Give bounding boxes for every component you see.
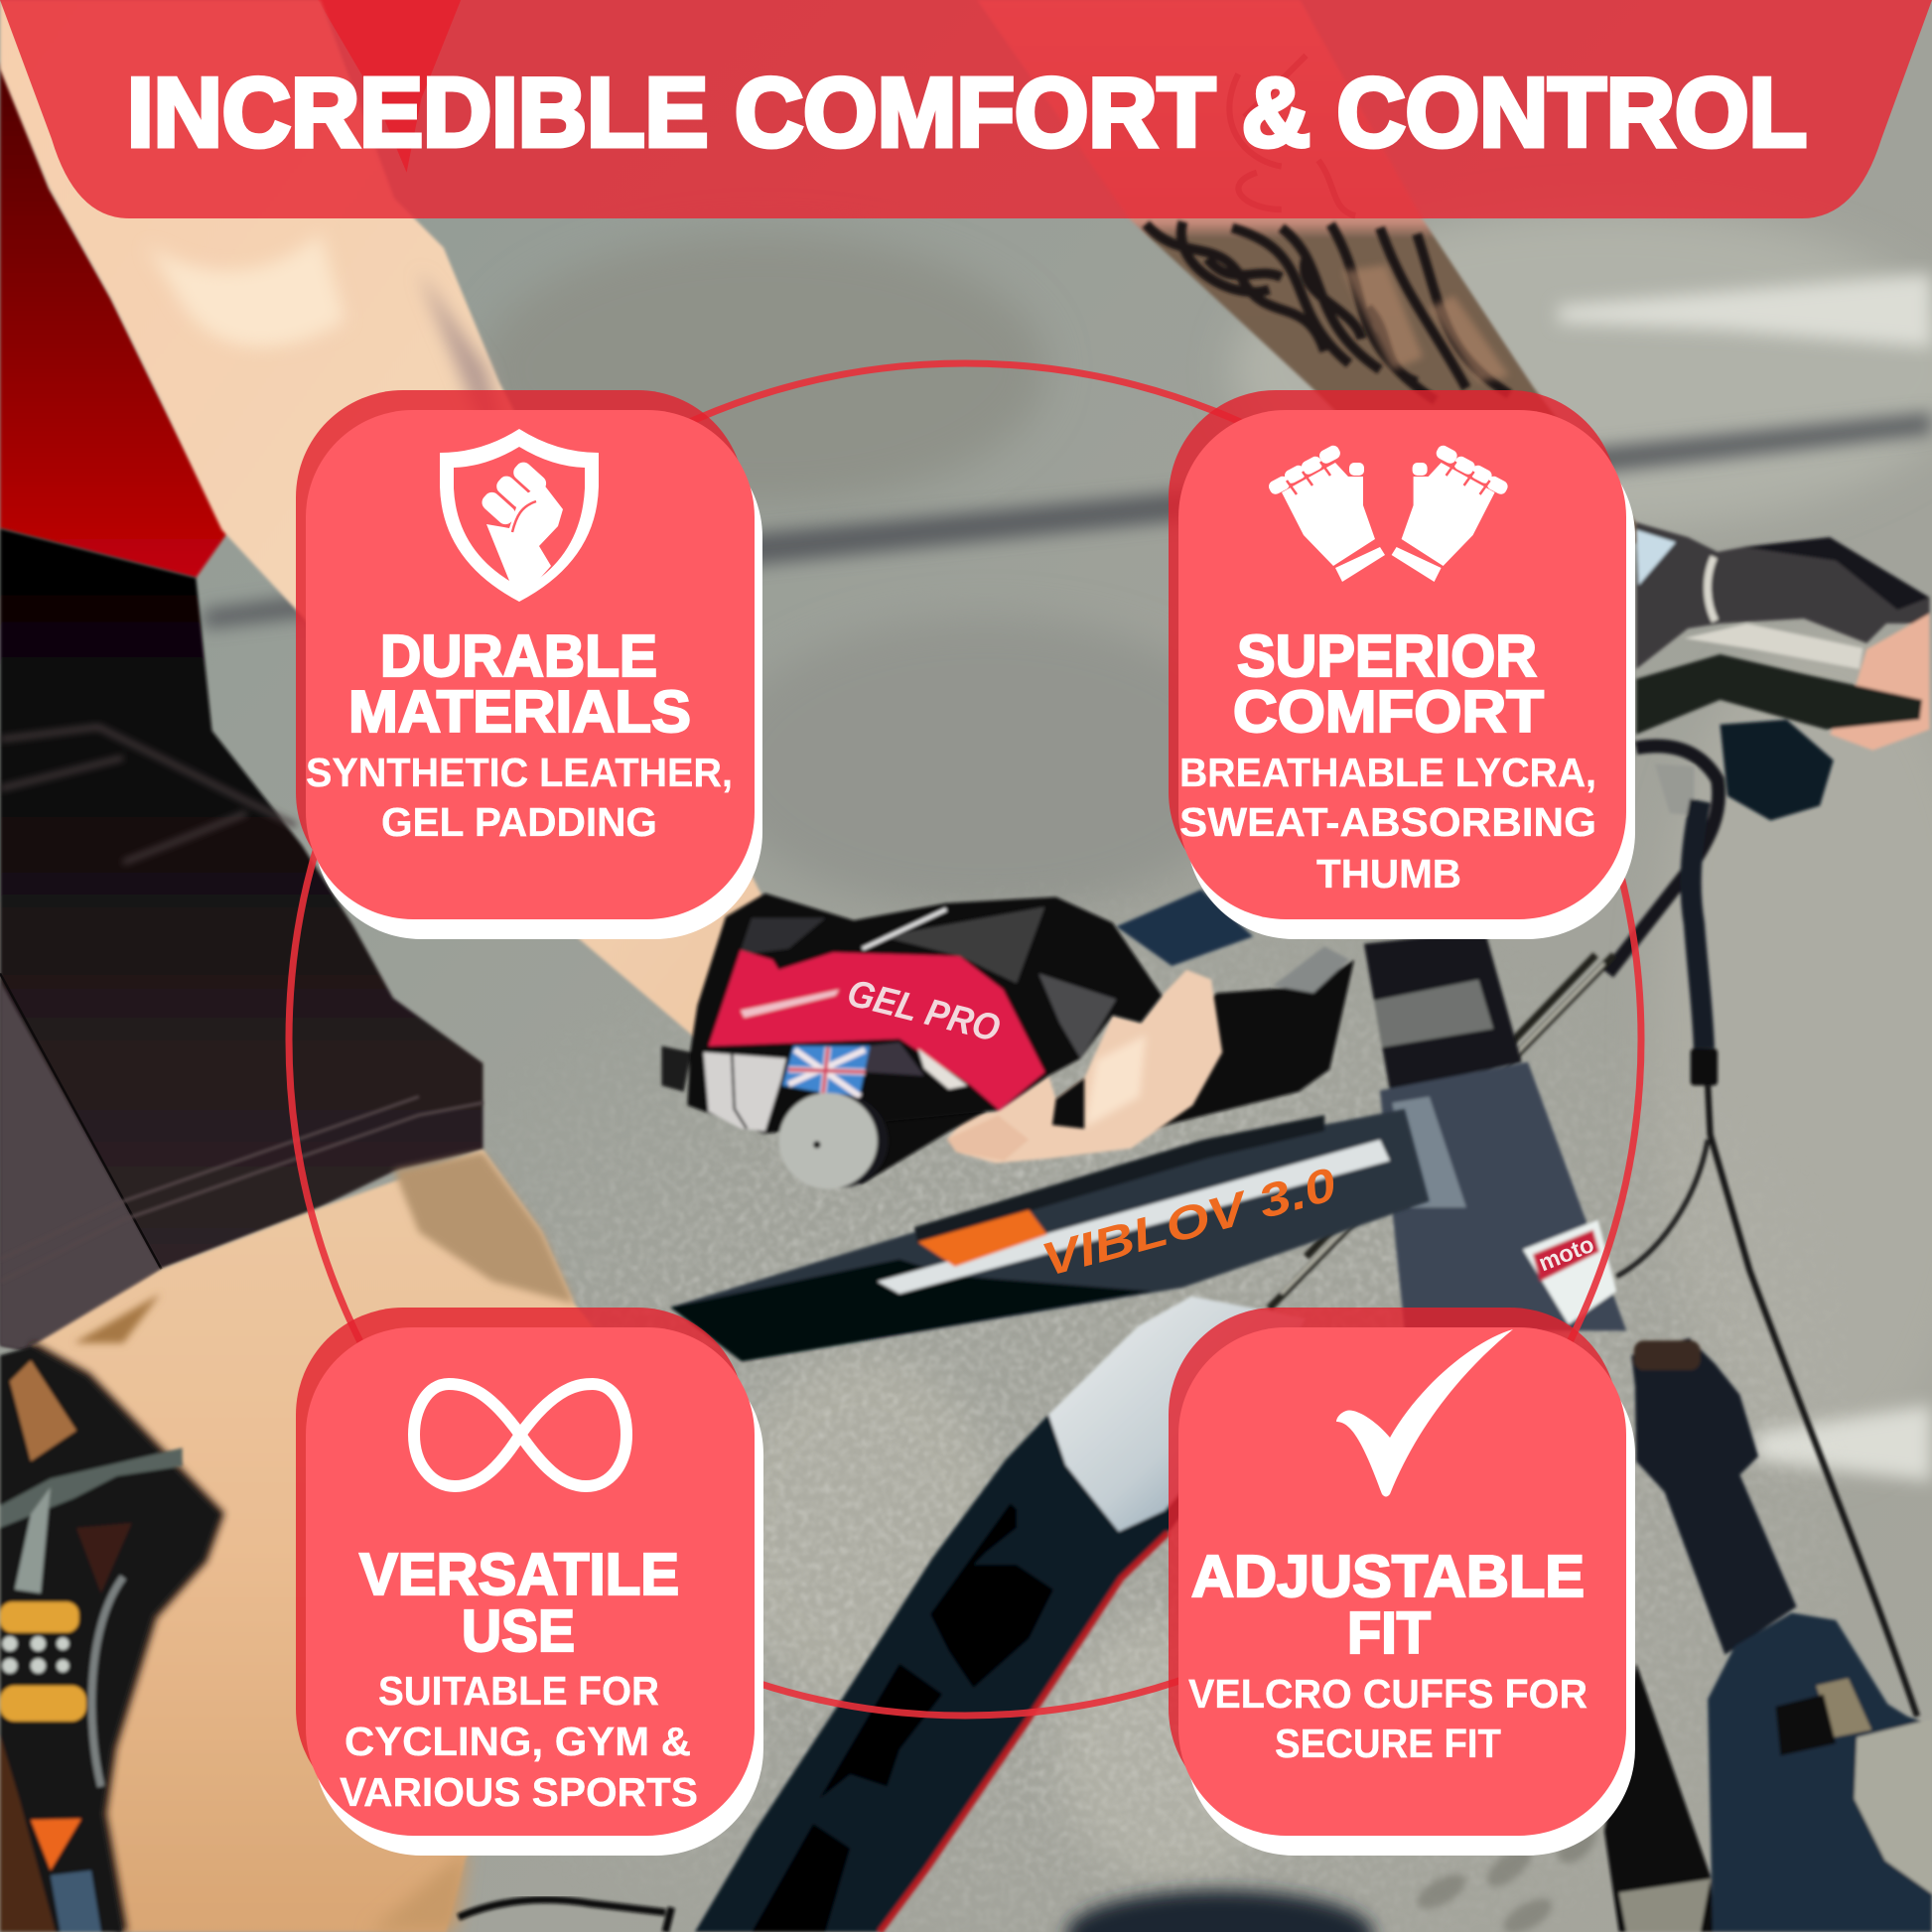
frame lettering: VIBLOV 3.0 (1036, 1158, 1341, 1286)
description: THUMB (1316, 851, 1461, 897)
down tube (695, 1297, 1307, 1932)
white palm (704, 1052, 786, 1131)
heading: MATERIALS (348, 679, 691, 745)
ground shadow (1066, 1890, 1374, 1932)
card back layer (1169, 390, 1617, 899)
description (1188, 1671, 1587, 1766)
red panel (709, 950, 1044, 1110)
glove black base (688, 894, 1162, 1134)
dark palm panel (865, 1042, 924, 1075)
description (340, 1668, 698, 1815)
heading: VERSATILE (359, 1542, 679, 1607)
card face (306, 1327, 755, 1836)
heading (1191, 1544, 1585, 1666)
description: SUITABLE FOR (378, 1668, 659, 1714)
icon: fingerless gloves (1267, 444, 1510, 582)
panel: durable materials (296, 390, 762, 939)
card back layer (1169, 1308, 1617, 1816)
icon: check mark (1336, 1329, 1513, 1497)
title banner (0, 0, 1932, 218)
card white offset layer (1186, 1347, 1635, 1856)
panel: versatile use (296, 1308, 763, 1856)
right glove (1392, 444, 1510, 582)
fingers (946, 970, 1222, 1164)
icon: shield with fist (440, 429, 599, 602)
card face (1178, 410, 1626, 919)
panel: adjustable fit (1169, 1308, 1635, 1856)
glove lettering: GEL PRO (843, 971, 1004, 1050)
description (1179, 750, 1596, 897)
description: CYCLING, GYM & (345, 1719, 691, 1764)
card white offset layer (1186, 430, 1635, 939)
description: GEL PADDING (381, 799, 657, 845)
far hand on handlebar (1269, 522, 1930, 1717)
heading: FIT (1347, 1600, 1431, 1666)
heading (348, 623, 691, 745)
description: VELCRO CUFFS FOR (1188, 1671, 1587, 1717)
flag patch (782, 1046, 870, 1099)
title text: INCREDIBLE COMFORT & CONTROL (127, 58, 1807, 167)
description: VARIOUS SPORTS (340, 1769, 698, 1815)
sticker lettering: moto (1535, 1231, 1597, 1276)
bar grip (838, 1072, 1084, 1184)
head tube and stem (1364, 930, 1626, 1330)
logo dashes (741, 990, 839, 1018)
heading: USE (462, 1598, 575, 1664)
dark frame lettering shapes (752, 1503, 1053, 1932)
card white offset layer (314, 430, 762, 939)
thigh (31, 1150, 617, 1932)
description: SECURE FIT (1275, 1721, 1501, 1766)
card face (306, 410, 755, 919)
description: SWEAT-ABSORBING (1179, 799, 1596, 845)
card face (1178, 1327, 1626, 1836)
heading: SUPERIOR (1237, 623, 1537, 689)
description: SYNTHETIC LEATHER, (306, 750, 733, 795)
bar end cap (790, 1094, 889, 1187)
tire tread (1412, 1814, 1604, 1932)
upper arm (0, 0, 763, 1059)
icon: infinity (414, 1384, 626, 1486)
cable by thigh (459, 1899, 671, 1932)
tattooed forearm (977, 0, 1651, 554)
description: BREATHABLE LYCRA, (1179, 750, 1596, 795)
heading: ADJUSTABLE (1191, 1544, 1585, 1609)
front fork and wheel (1604, 1338, 1932, 1932)
road background (199, 218, 1932, 1932)
heading: COMFORT (1233, 679, 1544, 745)
red connecting ring (289, 363, 1641, 1716)
panel: superior comfort (1169, 390, 1635, 939)
shorts side panel (0, 981, 162, 1353)
leg hair (394, 1152, 574, 1304)
red shirt (0, 0, 461, 578)
saddle bag and lock (0, 1346, 218, 1932)
mesh back panels (883, 906, 1044, 983)
card back layer (296, 390, 745, 899)
top tube (670, 1109, 1430, 1361)
left glove (1267, 444, 1385, 582)
near handlebar (1116, 890, 1354, 1129)
card white offset layer (314, 1347, 763, 1856)
black shorts (0, 528, 483, 1353)
heading: DURABLE (380, 623, 657, 689)
heading (1233, 623, 1544, 745)
cycling glove (661, 894, 1162, 1189)
wrist strap (661, 1046, 691, 1092)
card back layer (296, 1308, 745, 1816)
description (306, 750, 733, 845)
heading (359, 1542, 679, 1664)
